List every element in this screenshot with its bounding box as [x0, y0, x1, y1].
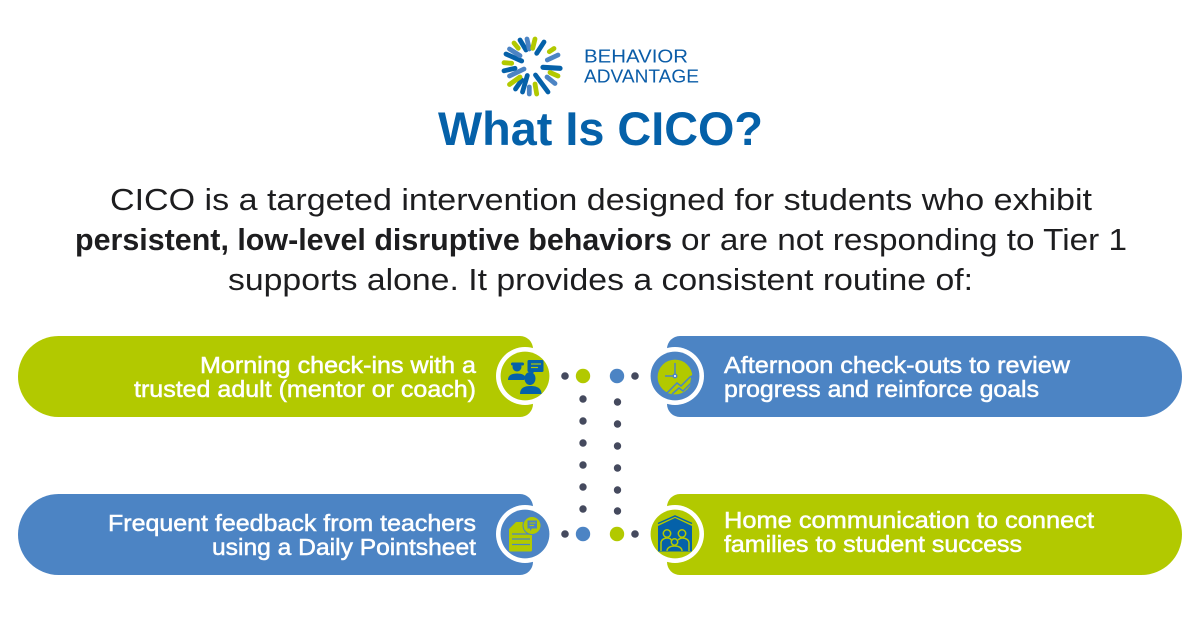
- dotted connector: left column: [579, 395, 587, 513]
- pill text: Afternoon check-outs to review: [724, 352, 1070, 378]
- pill text: Home communication to connect: [724, 507, 1095, 533]
- panel: afternoon check-outs: [646, 336, 1182, 417]
- logo wordmark: ADVANTAGE: [584, 66, 699, 86]
- pill text: Morning check-ins with a: [200, 352, 476, 378]
- pill background: [18, 494, 533, 575]
- logo wordmark: BEHAVIOR: [584, 46, 688, 66]
- pill text: using a Daily Pointsheet: [212, 534, 477, 560]
- pill text: [724, 507, 1095, 557]
- pill background: [18, 336, 533, 417]
- logo: Behavior Advantage: [504, 39, 699, 94]
- icon: pointsheet with speech bubble: [496, 505, 554, 563]
- intro paragraph: supports alone. It provides a consistent routine of:: [228, 263, 973, 297]
- icon: clock with rising chart: [646, 347, 704, 405]
- icon: logo sunburst: [504, 39, 560, 94]
- panel: morning check-ins: [18, 336, 554, 417]
- pill text: trusted adult (mentor or coach): [134, 376, 476, 402]
- pill text: [108, 510, 477, 560]
- panel: home communication: [646, 494, 1182, 575]
- icon: mentor and student talking: [496, 347, 554, 405]
- dotted connector: right column: [614, 398, 621, 515]
- pill text: [724, 352, 1070, 402]
- connector dots: [561, 369, 639, 541]
- pill background: [667, 336, 1182, 417]
- intro paragraph: or are not responding to Tier 1: [681, 223, 1127, 257]
- dotted connector: bottom row: [561, 527, 639, 541]
- icon: family in house: [646, 505, 704, 563]
- dotted connector: top row: [561, 369, 639, 383]
- pill text: families to student success: [724, 531, 1022, 557]
- pill text: Frequent feedback from teachers: [108, 510, 476, 536]
- intro paragraph: [75, 183, 1127, 297]
- panel: frequent feedback: [18, 494, 554, 575]
- pill background: [667, 494, 1182, 575]
- pill text: progress and reinforce goals: [724, 376, 1039, 402]
- intro paragraph: CICO is a targeted intervention designed for students who exhibit: [110, 183, 1093, 217]
- title: What Is CICO?: [438, 102, 763, 155]
- logo wordmark: [584, 46, 699, 86]
- pill text: [134, 352, 476, 402]
- intro paragraph: persistent, low-level disruptive behaviors: [75, 223, 672, 257]
